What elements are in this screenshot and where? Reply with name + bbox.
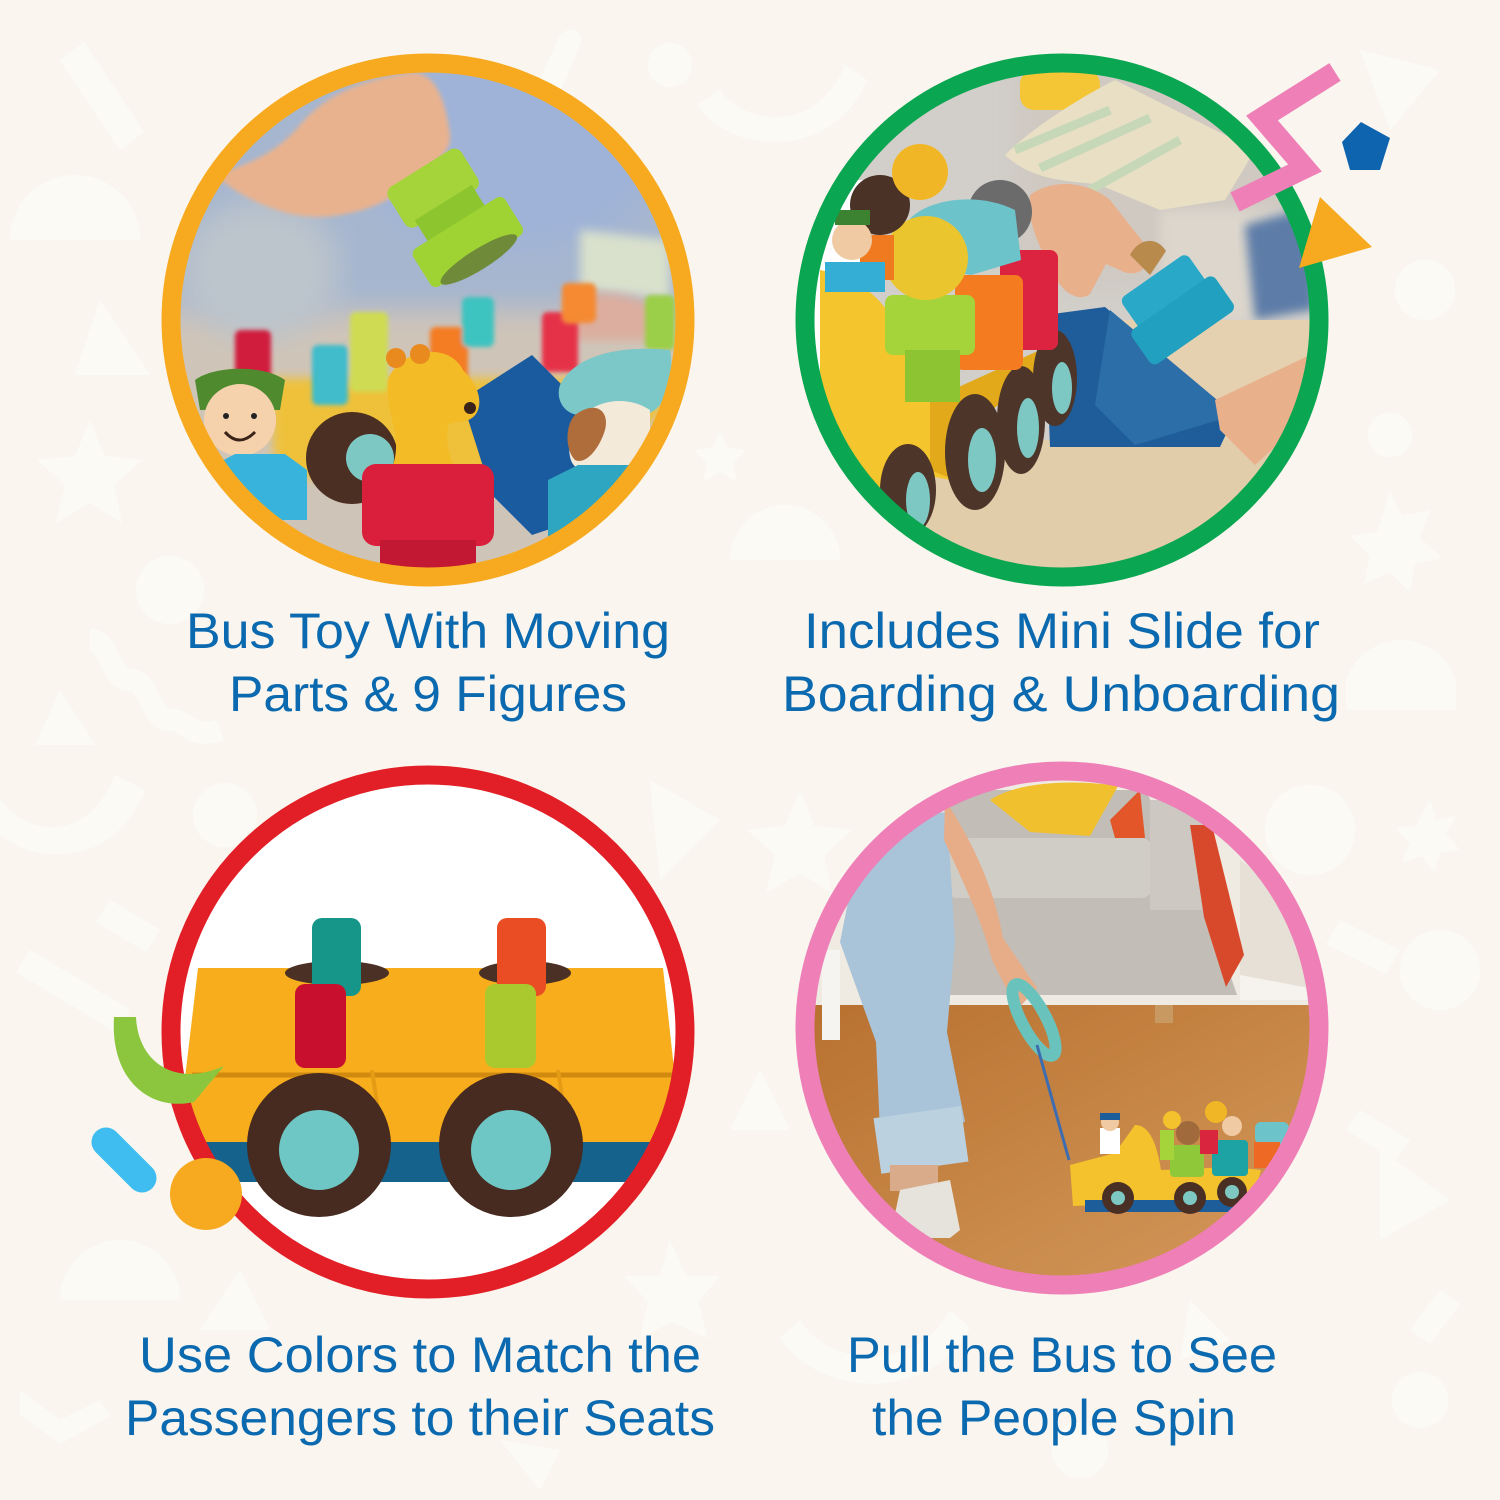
- caption: bus toy: [186, 603, 670, 722]
- icon: orange triangle: [1299, 197, 1372, 268]
- ring: orange: [171, 63, 685, 577]
- toy bus: [1070, 1125, 1261, 1206]
- pegs: [235, 283, 675, 405]
- caption: match colors: Use Colors to Match the: [139, 1327, 701, 1383]
- ring: green: [805, 63, 1319, 577]
- icon: blue pentagon: [1342, 122, 1390, 170]
- left figure: [195, 369, 285, 410]
- caption: mini slide: Boarding & Unboarding: [782, 666, 1340, 722]
- caption: match colors: Passengers to their Seats: [125, 1390, 715, 1446]
- icon: light blue pill: [106, 1142, 142, 1178]
- caption: mini slide: [782, 603, 1340, 722]
- icon: green arc: [114, 1017, 224, 1104]
- arm: [944, 800, 1037, 1010]
- giraffe figure: [388, 352, 479, 465]
- sofa: [940, 790, 1237, 995]
- wood floor: [800, 1005, 1320, 1290]
- photo circle: mini slide: [800, 60, 1320, 580]
- ring: red: [171, 775, 685, 1289]
- caption: pull the bus: the People Spin: [872, 1390, 1236, 1446]
- blue figure: [1122, 255, 1234, 364]
- photo circle: colors and seats: [170, 770, 690, 1290]
- caption: match colors: [125, 1327, 715, 1446]
- bus side: [185, 968, 675, 1142]
- jeans child: [840, 812, 965, 1132]
- blue slide: [468, 355, 576, 535]
- caption: bus toy: Parts & 9 Figures: [229, 666, 627, 722]
- elephant: [559, 349, 671, 415]
- wheels: [247, 1073, 391, 1217]
- front pegs: [295, 984, 346, 1068]
- lower hand: [1215, 355, 1310, 465]
- teal ring handle: [1005, 979, 1063, 1061]
- wheel: [306, 412, 398, 504]
- icon: pink zigzag: [1235, 72, 1335, 202]
- hand: [215, 73, 450, 217]
- caption: mini slide: Includes Mini Slide for: [804, 603, 1320, 659]
- green figure: [387, 148, 524, 288]
- figures stack: [1000, 250, 1058, 350]
- ring: pink: [805, 771, 1319, 1285]
- dog: [569, 401, 650, 470]
- dark base: [195, 1142, 675, 1182]
- caption: bus toy: Bus Toy With Moving: [186, 603, 670, 659]
- cushion: [990, 783, 1118, 836]
- wheels: [1033, 330, 1077, 426]
- photo circle: pull the bus: [800, 770, 1320, 1290]
- toy figures: [1100, 1128, 1120, 1154]
- caption: pull the bus: Pull the Bus to See: [847, 1327, 1277, 1383]
- bus base yellow: [270, 378, 660, 478]
- photo circle: child placing figure on bus: [180, 72, 676, 568]
- hand: [1029, 184, 1149, 297]
- icon: orange dot: [170, 1158, 242, 1230]
- string: [1037, 1045, 1069, 1160]
- bus body: [820, 270, 949, 488]
- rear pegs: [285, 961, 389, 985]
- caption: pull the bus: [847, 1327, 1277, 1446]
- striped sleeve: [1005, 80, 1255, 210]
- slide: [1045, 307, 1235, 447]
